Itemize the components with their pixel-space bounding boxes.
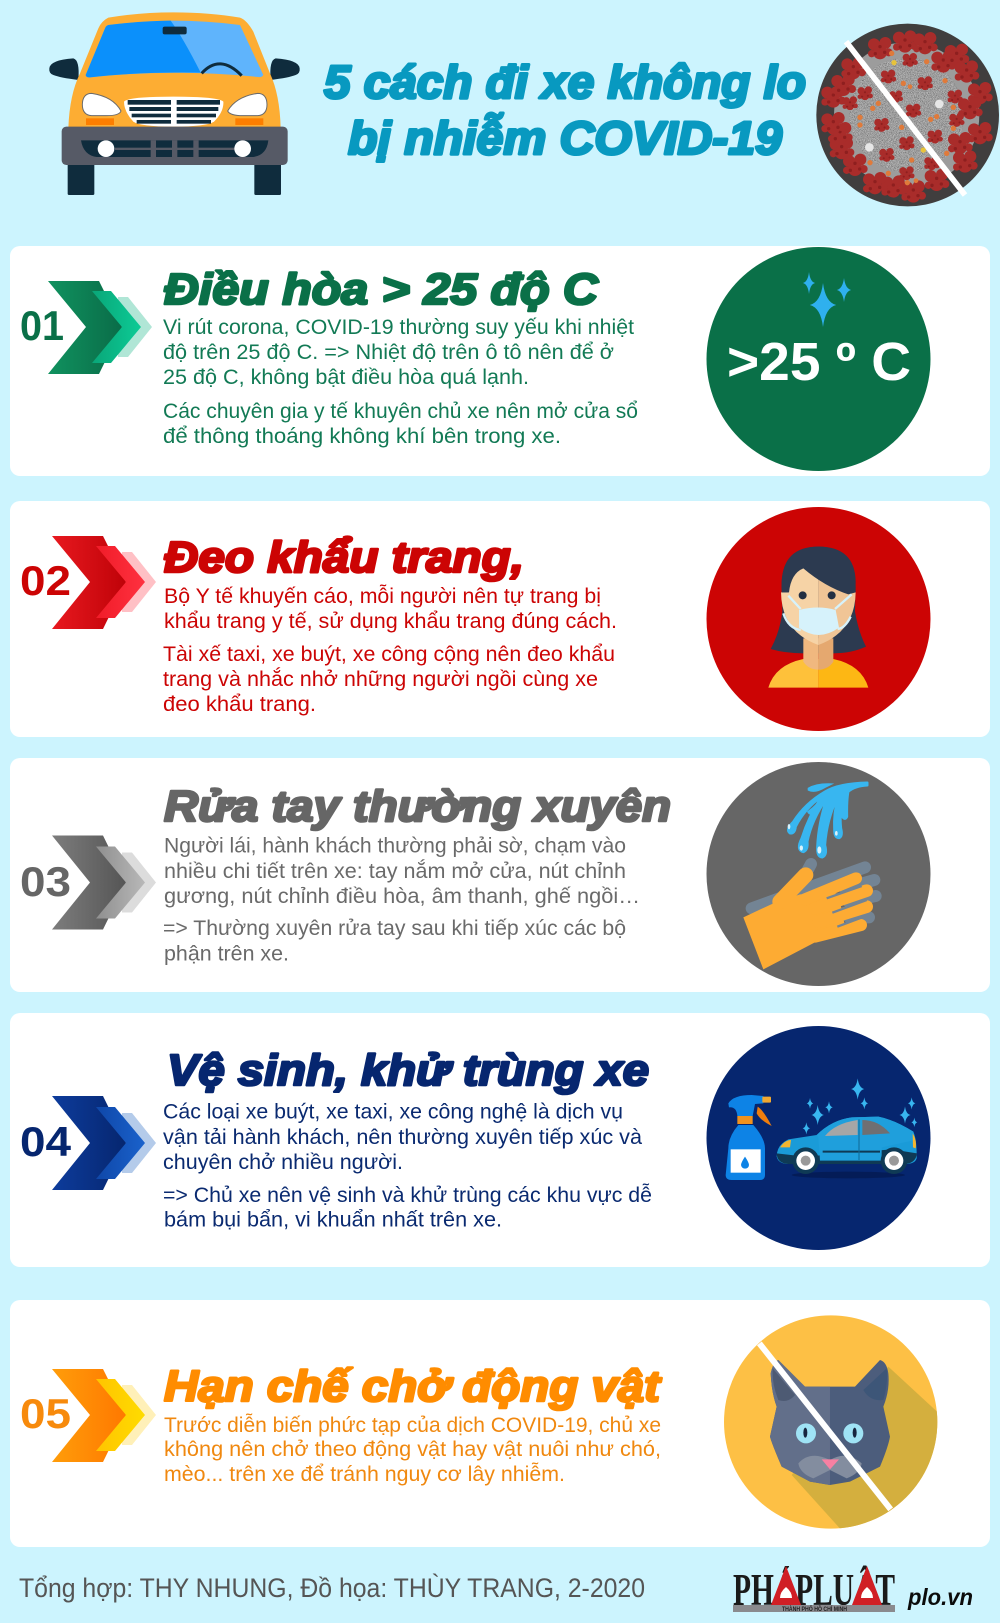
icon: temperature circle: >25 º C (727, 332, 911, 392)
text block: air conditioning (163, 316, 638, 448)
text block: wear a mask: Tài xế taxi, xe buýt, xe công cộng nên đeo khẩu (163, 643, 615, 666)
text block: air conditioning: Vi rút corona, COVID-19 thường suy yếu khi nhiệt (163, 316, 634, 339)
chevron 02 (52, 536, 156, 629)
text block: limit animals (164, 1414, 661, 1486)
number 03: 03 (20, 858, 71, 905)
text block: wear a mask: đeo khẩu trang. (163, 693, 316, 716)
panel 3: wash hands (10, 758, 990, 992)
text block: wash hands: Người lái, hành khách thường phải sờ, chạm vào (164, 834, 626, 858)
heading: disinfect the car: Vệ sinh, khử trùng xe (167, 1046, 649, 1095)
text block: wear a mask: Bộ Y tế khuyến cáo, mỗi người nên tự trang bị (164, 585, 601, 608)
text block: air conditioning: để thông thoáng không khí bên trong xe. (163, 425, 561, 448)
text block: disinfect the car: Các loại xe buýt, xe taxi, xe công nghệ là dịch vụ (163, 1100, 623, 1124)
number 02: 02 (20, 557, 71, 604)
website label: plo.vn (907, 1584, 973, 1610)
logo: Pháp Luật: PHÁPLUẬT (733, 1565, 895, 1615)
text block: disinfect the car (163, 1100, 652, 1232)
text block: air conditioning: độ trên 25 độ C. => Nhiệt độ trên ô tô nên để ở (163, 341, 614, 364)
title: bị nhiễm COVID-19 (348, 112, 782, 164)
icon: yellow car front view (49, 12, 300, 195)
heading: wash hands: Rửa tay thường xuyên (164, 782, 671, 831)
text block: wear a mask: trang và nhắc nhở những người ngồi cùng xe (163, 668, 598, 691)
icon: woman wearing a mask (706, 507, 930, 731)
title: 5 cách đi xe không lo (324, 56, 806, 108)
icon: crossed-out coronavirus (816, 24, 999, 206)
heading: wear a mask: Đeo khẩu trang, (164, 533, 524, 582)
text block: disinfect the car: chuyên chở nhiều người. (163, 1151, 403, 1174)
heading: limit animals: Hạn chế chở động vật (164, 1362, 663, 1411)
chevron 05 (52, 1369, 156, 1462)
text block: disinfect the car: vận tải hành khách, nên thường xuyên tiếp xúc và (163, 1126, 642, 1149)
text block: wear a mask: khẩu trang y tế, sử dụng khẩu trang đúng cách. (164, 610, 617, 633)
footer credit: Tổng hợp: THY NHUNG, Đồ họa: THÙY TRANG, 2-2020 (19, 1572, 645, 1603)
text block: wash hands (163, 834, 640, 966)
icon: temperature circle (706, 247, 930, 471)
text block: wash hands: nhiều chi tiết trên xe: tay nắm mở cửa, nút chỉnh (164, 860, 626, 883)
text block: limit animals: không nên chở theo động vật hay vật nuôi như chó, (164, 1438, 661, 1461)
text block: wash hands: phận trên xe. (164, 942, 289, 966)
text block: limit animals: Trước diễn biến phức tạp của dịch COVID-19, chủ xe (164, 1414, 661, 1437)
text block: disinfect the car: bám bụi bẩn, vi khuẩn nhất trên xe. (164, 1208, 502, 1232)
panel 5: limit animals (10, 1300, 990, 1547)
panel 2: wear a mask (10, 501, 990, 737)
heading: air conditioning: Điều hòa > 25 độ C (164, 265, 599, 314)
text block: wash hands: gương, nút chỉnh điều hòa, âm thanh, ghế ngồi… (164, 885, 640, 908)
text block: wear a mask (163, 585, 617, 716)
icon: crossed-out cat (724, 1315, 938, 1529)
text block: air conditioning: 25 độ C, không bật điều hòa quá lạnh. (163, 366, 529, 389)
logo: Pháp Luật (733, 1565, 895, 1618)
number 01: 01 (20, 302, 64, 349)
number 05: 05 (20, 1390, 71, 1437)
panel 1: air conditioning (10, 246, 990, 476)
icon: hand under water (706, 762, 930, 986)
text block: wash hands: => Thường xuyên rửa tay sau khi tiếp xúc các bộ (163, 917, 626, 940)
text block: limit animals: mèo... trên xe để tránh nguy cơ lây nhiễm. (164, 1463, 565, 1486)
chevron 01 (48, 281, 152, 374)
chevron 03 (52, 836, 156, 930)
number 04: 04 (20, 1118, 72, 1165)
icon: spray bottle and blue car (706, 1026, 930, 1250)
text block: disinfect the car: => Chủ xe nên vệ sinh và khử trùng các khu vực dễ (163, 1184, 652, 1207)
panel 4: disinfect the car (10, 1013, 990, 1267)
chevron 04 (52, 1096, 156, 1190)
title (324, 56, 806, 164)
text block: air conditioning: Các chuyên gia y tế khuyên chủ xe nên mở cửa sổ (163, 400, 638, 423)
logo: Pháp Luật: THÀNH PHỐ HỒ CHÍ MINH (782, 1605, 847, 1613)
